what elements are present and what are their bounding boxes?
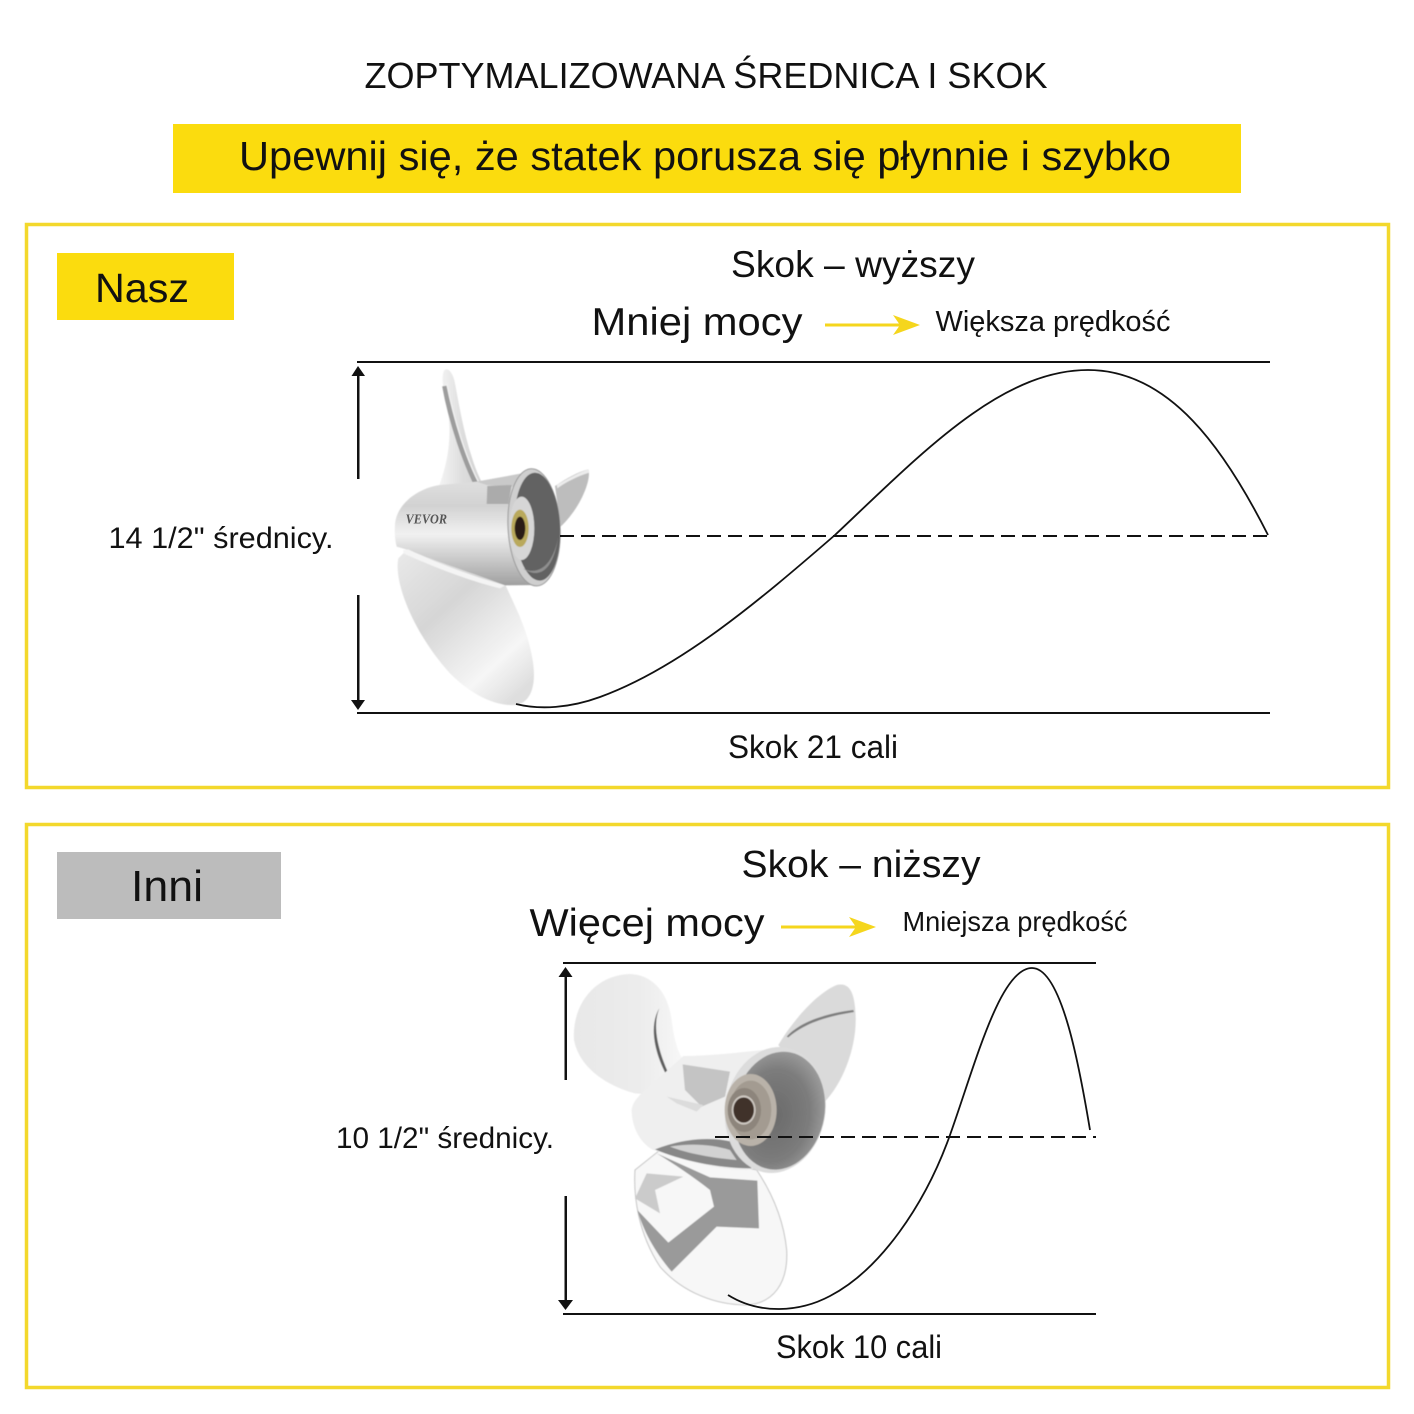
label: diameter: 14 1/2" średnicy. [108,522,334,555]
arrow: yellow [825,315,920,335]
icon: propeller Vevor [395,369,589,705]
badge: Inni: Inni [131,862,203,911]
dashed center line [715,1136,1096,1138]
yellow banner: Upewnij się, że statek porusza się płynnie i szybko [239,133,1171,179]
label: pitch: Skok 10 cali [776,1329,942,1365]
title: ZOPTYMALIZOWANA ŚREDNICA I SKOK [364,54,1048,96]
label: less power: Mniej mocy [592,301,803,344]
badge: Inni [57,852,281,919]
diameter arrow [351,366,365,710]
panel: ours [26,224,1388,788]
pitch guide lines [563,963,1096,1314]
label: higher speed: Większa prędkość [936,306,1170,338]
logo: VEVOR: VEVOR [406,511,447,526]
pitch curve [728,968,1090,1309]
arrow: yellow [781,917,876,937]
icon: propeller other [574,974,856,1305]
diameter arrow [558,967,573,1310]
pitch curve [516,370,1268,707]
badge: Nasz [57,253,234,320]
panel: others [26,824,1388,1388]
label: more power: Więcej mocy [530,902,765,945]
pitch guide lines [357,362,1270,713]
heading: lower pitch: Skok – niższy [742,844,980,886]
label: diameter: 10 1/2" średnicy. [336,1122,554,1155]
heading: higher pitch: Skok – wyższy [731,244,975,285]
yellow banner [173,124,1241,193]
label: pitch: Skok 21 cali [728,729,898,765]
label: lower speed: Mniejsza prędkość [902,906,1128,937]
badge: Nasz: Nasz [95,265,189,311]
dashed center line [560,535,1270,537]
